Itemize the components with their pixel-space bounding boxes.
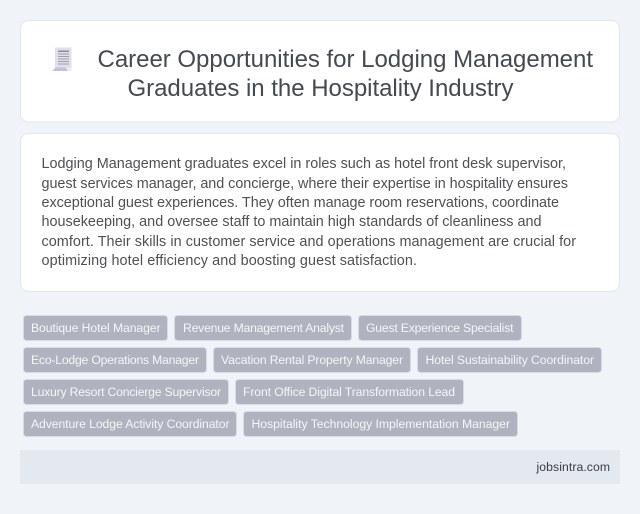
text block: description paragraph: Lodging Management graduates excel in roles such as hotel front desk supervisor, (42, 156, 566, 172)
footer (20, 450, 620, 484)
title: Career Opportunities for Lodging Management (98, 46, 593, 73)
tag: Boutique Hotel Manager: Boutique Hotel Manager (31, 321, 160, 335)
tag: Hospitality Technology Implementation Manager (244, 412, 518, 436)
icon: document scroll (52, 48, 72, 71)
tag: Front Office Digital Transformation Lead (236, 380, 464, 404)
title: Graduates in the Hospitality Industry (128, 75, 514, 102)
footer: jobsintra.com (536, 460, 610, 474)
tag: Vacation Rental Property Manager: Vacation Rental Property Manager (221, 353, 403, 367)
tag: Guest Experience Specialist (358, 316, 522, 340)
tag: Hotel Sustainability Coordinator (418, 348, 602, 372)
tag: Revenue Management Analyst (174, 316, 352, 340)
tag: Eco-Lodge Operations Manager (24, 348, 206, 372)
tag: Luxury Resort Concierge Supervisor: Luxury Resort Concierge Supervisor (31, 385, 221, 399)
text block: description paragraph: guest services manager, and concierge, where their expertise in hospitality ensures (42, 176, 568, 192)
text block: description paragraph: comfort. Their skills in customer service and operations management are crucial for (42, 234, 576, 250)
tag: Eco-Lodge Operations Manager: Eco-Lodge Operations Manager (31, 353, 199, 367)
tag: Hotel Sustainability Coordinator: Hotel Sustainability Coordinator (426, 353, 594, 367)
tag: Hospitality Technology Implementation Manager: Hospitality Technology Implementation Manager (252, 417, 510, 431)
tag: Luxury Resort Concierge Supervisor (24, 380, 228, 404)
tag: Front Office Digital Transformation Lead: Front Office Digital Transformation Lead (243, 385, 455, 399)
panel: page header (20, 20, 620, 122)
tag: Vacation Rental Property Manager (214, 348, 410, 372)
panel: description (20, 134, 620, 292)
tag: Revenue Management Analyst: Revenue Management Analyst (183, 321, 345, 335)
text block: description paragraph: housekeeping, and oversee staff to maintain high standards of cleanliness and (42, 214, 542, 230)
text block: description paragraph: optimizing hotel efficiency and boosting guest satisfaction. (42, 253, 417, 269)
title (98, 46, 593, 102)
text block: description paragraph: exceptional guest experiences. They often manage room reservations, coordinate (42, 195, 559, 211)
text block: description paragraph (42, 156, 576, 269)
tag: Guest Experience Specialist: Guest Experience Specialist (366, 321, 514, 335)
tag: Adventure Lodge Activity Coordinator: Adventure Lodge Activity Coordinator (31, 417, 230, 431)
tag: Boutique Hotel Manager (24, 316, 168, 340)
tag: Adventure Lodge Activity Coordinator (24, 412, 236, 436)
tag list: career roles (24, 316, 602, 436)
